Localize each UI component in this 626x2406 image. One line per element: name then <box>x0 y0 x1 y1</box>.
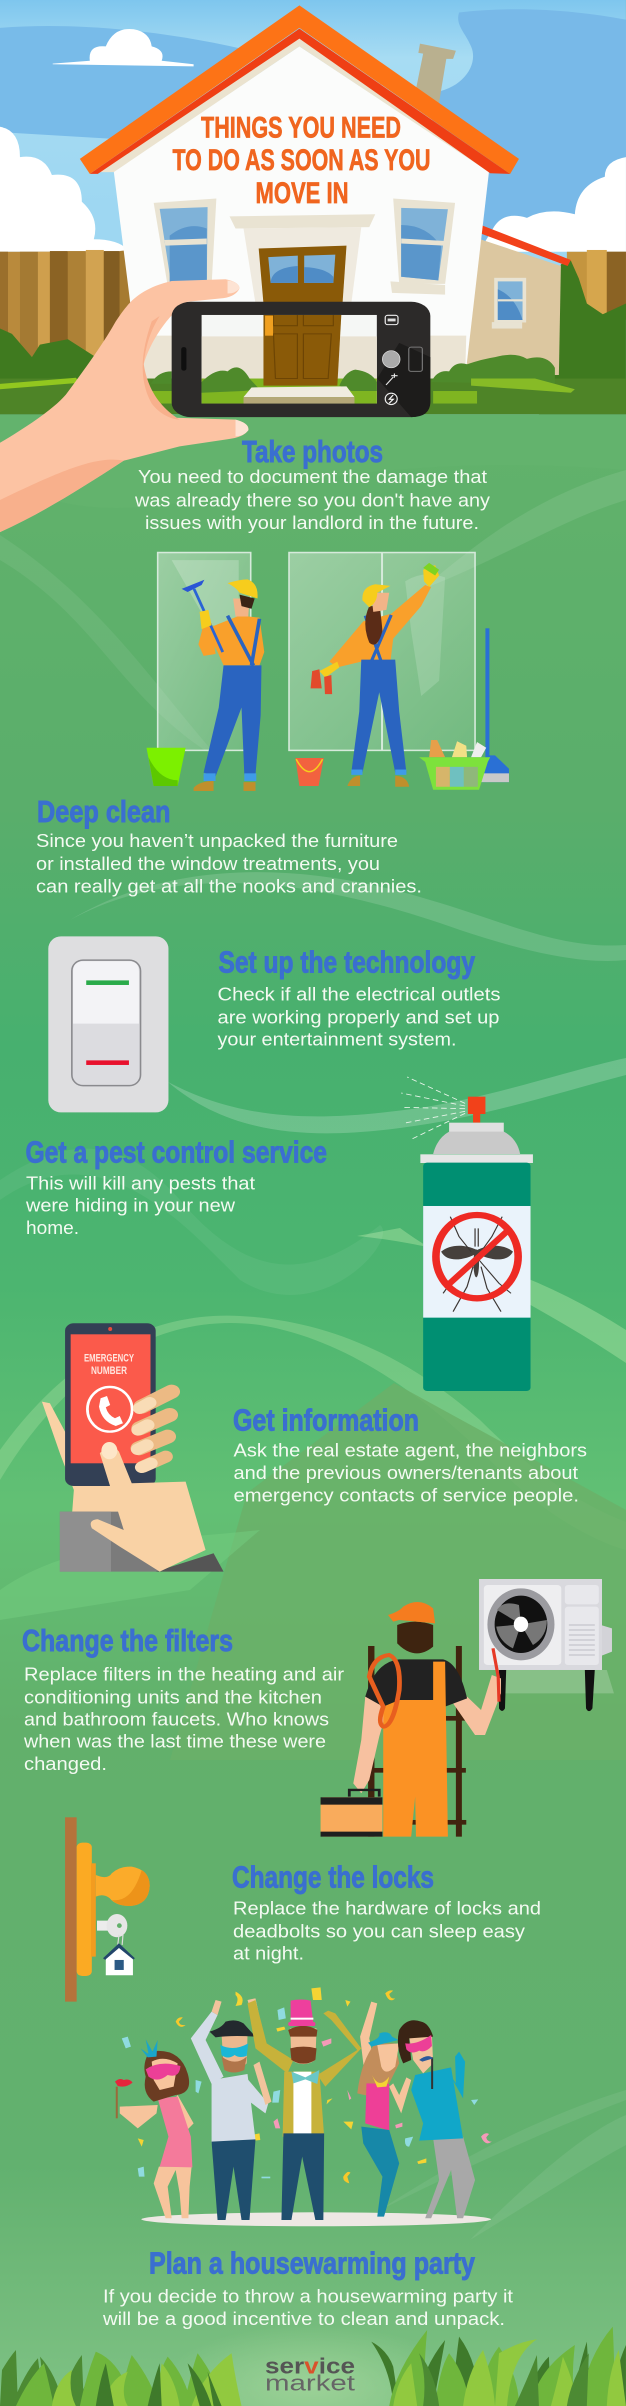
floor <box>141 2212 491 2226</box>
house walls <box>114 46 489 379</box>
section: change the locks <box>232 1859 541 1963</box>
chimney <box>416 44 456 107</box>
section: set up the technology: Check if all the electrical outlets <box>218 984 500 1005</box>
section: change the locks: at night. <box>233 1942 304 1963</box>
section: pest control: home. <box>26 1217 79 1238</box>
section: deep clean: or installed the window treatments, you <box>36 853 380 874</box>
pointing hand <box>91 1446 206 1572</box>
phone call icon <box>87 1387 132 1432</box>
worker man <box>182 579 264 791</box>
logo: service market: market <box>265 2371 355 2396</box>
section: change the filters: conditioning units and the kitchen <box>24 1686 322 1707</box>
title: THINGS YOU NEED <box>201 112 401 144</box>
illustration: technician and air conditioner <box>321 1579 614 1837</box>
windows <box>158 553 475 750</box>
section: take photos: issues with your landlord in the future. <box>145 512 479 533</box>
cloud small <box>53 29 194 66</box>
section: deep clean <box>36 794 422 896</box>
fence right <box>567 250 626 320</box>
logo: service market <box>265 2353 355 2396</box>
section: change the filters: Change the filters <box>22 1623 233 1658</box>
title: TO DO AS SOON AS YOU <box>172 144 430 177</box>
section: change the locks: deadbolts so you can sleep easy <box>233 1920 526 1941</box>
logo: service market: ser vice <box>265 2353 355 2378</box>
section: housewarming party <box>102 2245 513 2329</box>
shrubs in front of house <box>151 355 575 404</box>
phone screen showing door <box>202 315 377 404</box>
party guest 4: dancing woman <box>357 2002 411 2217</box>
section: pest control: were hiding in your new <box>25 1195 236 1216</box>
hand holding phone <box>0 279 248 532</box>
section: take photos: You need to document the damage that <box>138 466 487 487</box>
window left <box>154 199 216 286</box>
section: set up the technology <box>218 944 500 1049</box>
section: take photos: was already there so you don't have any <box>134 489 491 510</box>
cleaning basket and mop <box>419 628 509 790</box>
mosquito <box>441 1217 513 1312</box>
section: change the filters: when was the last time these were <box>23 1731 326 1752</box>
section: change the locks: Change the locks <box>232 1859 434 1894</box>
fingers <box>138 1392 172 1467</box>
emergency label <box>84 1353 134 1377</box>
ground and hedges <box>0 261 626 414</box>
sky <box>0 0 626 414</box>
section: get information: and the previous owners/tenants about <box>234 1462 578 1483</box>
section: take photos <box>134 434 491 533</box>
grass left <box>0 2350 242 2406</box>
air conditioner unit <box>479 1579 614 1711</box>
section: take photos: Take photos <box>242 434 383 469</box>
illustration: housewarming party <box>115 1987 492 2226</box>
icon: hand with emergency phone <box>42 1323 224 1572</box>
section: change the filters: changed. <box>24 1753 107 1774</box>
icon: insect spray can <box>401 1077 533 1391</box>
emergency label: EMERGENCY <box>84 1353 134 1365</box>
fence left <box>0 250 136 366</box>
section: get information: Ask the real estate agent, the neighbors <box>234 1440 587 1461</box>
window right <box>390 199 455 295</box>
camera controls <box>382 315 422 405</box>
section: housewarming party: Plan a housewarming party <box>149 2245 476 2280</box>
roof <box>80 5 519 174</box>
cloud right <box>479 157 626 252</box>
party guest 1: woman in pink dress <box>115 2039 194 2218</box>
ladder <box>365 1646 466 1837</box>
section: set up the technology: your entertainment system. <box>218 1028 456 1049</box>
confetti <box>122 1987 492 2183</box>
illustration: window cleaners <box>147 553 509 791</box>
section: change the filters: Replace filters in the heating and air <box>24 1664 344 1685</box>
title <box>172 112 430 210</box>
section: deep clean: can really get at all the nooks and crannies. <box>36 875 422 896</box>
section: pest control <box>25 1135 327 1238</box>
section: deep clean: Since you haven’t unpacked the furniture <box>36 830 398 851</box>
cloud left <box>0 127 130 252</box>
hero scene: house and sky <box>0 0 626 532</box>
section: get information: Get information <box>233 1403 419 1438</box>
extension wing <box>459 224 571 375</box>
sleeve <box>60 1512 160 1572</box>
section: get information: emergency contacts of service people. <box>234 1485 579 1506</box>
spray mist <box>401 1077 465 1139</box>
section: housewarming party: will be a good incentive to clean and unpack. <box>102 2308 505 2329</box>
title: MOVE IN <box>256 177 348 210</box>
icon: door knob with key <box>65 1817 150 2002</box>
section: deep clean: Deep clean <box>37 794 170 829</box>
smartphone <box>172 302 430 417</box>
front door <box>230 214 375 304</box>
section: get information <box>233 1403 587 1506</box>
party guest 5: man with moustache prop <box>398 2020 475 2218</box>
worker woman <box>311 563 439 787</box>
grass right <box>371 2327 626 2406</box>
section: set up the technology: Set up the technology <box>218 944 476 979</box>
section: change the locks: Replace the hardware of locks and <box>233 1897 541 1918</box>
section: change the filters <box>22 1623 344 1774</box>
section: housewarming party: If you decide to throw a housewarming party it <box>103 2286 513 2307</box>
green bucket <box>147 748 186 786</box>
technician <box>321 1602 501 1837</box>
emergency label: NUMBER <box>91 1365 127 1377</box>
red bucket <box>295 758 324 786</box>
party guest 2: pirate man <box>191 1998 271 2220</box>
party guest 3: man in top hat <box>248 1999 361 2220</box>
icon: light switch <box>48 936 168 1112</box>
section: pest control: Get a pest control service <box>26 1135 327 1170</box>
section: pest control: This will kill any pests that <box>26 1172 255 1193</box>
section: set up the technology: are working properly and set up <box>218 1007 500 1028</box>
section: change the filters: and bathroom faucets. Who knows <box>24 1708 329 1729</box>
